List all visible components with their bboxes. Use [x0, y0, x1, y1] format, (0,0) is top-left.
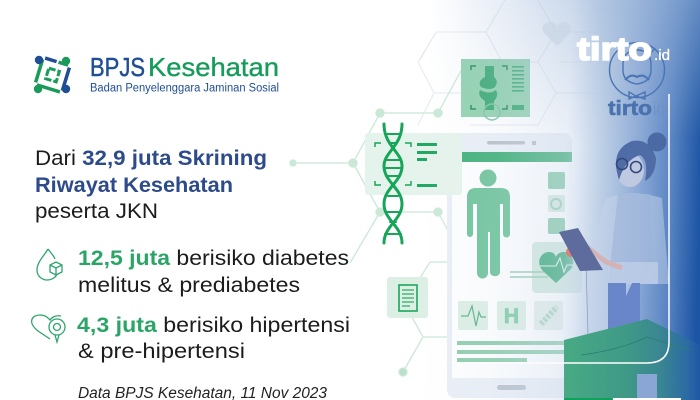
heart icon watermark	[542, 22, 572, 46]
stat: hypertension: 4,3 juta berisiko hipertensi	[77, 314, 350, 337]
logo: wordmark	[90, 52, 279, 94]
panel: DNA scan	[365, 133, 462, 195]
connector lines	[290, 67, 552, 376]
side status tiles	[548, 172, 565, 234]
logo: tirto.id white	[577, 31, 670, 67]
phone mockup	[447, 133, 572, 398]
logo: wordmark: Kesehatan	[148, 52, 279, 82]
stat: hypertension	[77, 314, 350, 363]
heading	[35, 147, 267, 223]
watermark: tirto.id	[608, 98, 665, 120]
icon: water drop with cube	[37, 249, 62, 280]
watermark: tirto.id: tirto	[608, 98, 652, 120]
tile row: H	[504, 305, 519, 328]
seat block	[564, 319, 700, 400]
tablet	[559, 228, 603, 271]
text lines on phone	[457, 341, 572, 362]
top blue tint	[459, 0, 700, 120]
heading: Dari 32,9 juta Skrining	[35, 147, 267, 170]
heading: peserta JKN	[35, 200, 158, 223]
watermark: tirto mascot	[610, 42, 664, 99]
watermark: tirto.id: id	[653, 99, 665, 119]
stat: hypertension: & pre-hipertensi	[78, 340, 245, 363]
logo: wordmark: BPJS	[90, 52, 145, 82]
stat: diabetes: melitus & prediabetes	[78, 274, 300, 297]
icon: heart with gauge	[32, 315, 65, 342]
tile row	[458, 301, 563, 330]
background hexagon network	[418, 0, 640, 155]
icon: body figure	[467, 170, 510, 278]
doctor figure	[566, 132, 669, 335]
icon: DNA helix	[384, 124, 402, 243]
logo: wordmark: Badan Penyelenggara Jaminan Sosial	[90, 82, 279, 94]
heading: Riwayat Kesehatan	[35, 174, 233, 197]
logo: tirto.id white: .id	[654, 47, 670, 64]
panel: document icon	[387, 277, 428, 318]
logo: BPJS Kesehatan mark	[34, 56, 70, 93]
stat: diabetes	[78, 247, 349, 297]
panel: x-ray knee	[461, 59, 530, 120]
stat: diabetes: 12,5 juta berisiko diabetes	[78, 247, 349, 270]
white frame fade	[430, 362, 565, 364]
white frame right side	[565, 94, 669, 363]
logo: tirto.id white: tirto	[577, 31, 652, 67]
panel: heart rate	[510, 242, 582, 293]
